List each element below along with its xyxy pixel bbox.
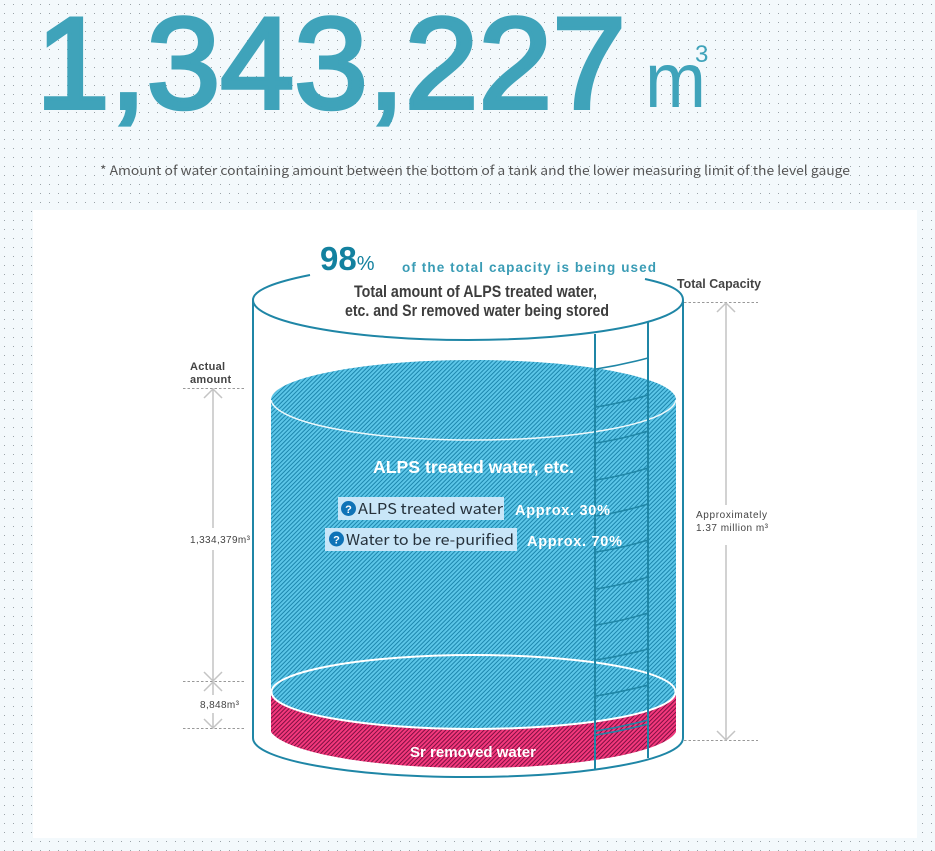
icon: question mark: ? xyxy=(345,504,352,516)
icon: question mark: ? xyxy=(333,534,340,546)
footnote: * Amount of water containing amount between the bottom of a tank and the lower measuring limit of the level gauge xyxy=(100,160,850,179)
label: ALPS treated water, etc.: ALPS treated water, etc. xyxy=(373,457,574,477)
water: Sr removed water: Sr removed water xyxy=(410,744,536,761)
icon: question mark xyxy=(329,532,344,546)
row: ALPS treated water 30%: ALPS treated water xyxy=(358,498,503,519)
label: total amount stored xyxy=(345,282,609,320)
label: total amount stored: Total amount of ALPS treated water, xyxy=(354,282,597,301)
row: water to be re-purified 70%: Water to be re-purified xyxy=(346,529,514,550)
callout: 98% usage: of the total capacity is being used xyxy=(402,260,656,275)
row: water to be re-purified 70%: Approx. 70% xyxy=(527,534,622,550)
row: ALPS treated water 30% xyxy=(338,497,610,520)
callout: 98% usage: 98% xyxy=(320,240,375,277)
dimension: actual amount xyxy=(183,361,251,728)
water: Sr removed water xyxy=(271,690,676,768)
dimension: actual amount: 8,848m³ xyxy=(200,700,240,711)
dimension: total capacity: Total Capacity xyxy=(677,277,761,291)
icon: question mark xyxy=(341,501,356,516)
row: ALPS treated water 30%: Approx. 30% xyxy=(515,503,610,519)
dimension: actual amount: 1,334,379m³ xyxy=(190,535,251,546)
water: ALPS treated water, etc. xyxy=(271,360,676,730)
row: water to be re-purified 70% xyxy=(325,528,622,551)
dimension: total capacity: 1.37 million m³ xyxy=(696,523,769,534)
tank diagram xyxy=(253,275,683,777)
callout: 98% usage xyxy=(320,240,656,277)
title: total volume figure: m xyxy=(645,36,706,124)
label: total amount stored: etc. and Sr removed water being stored xyxy=(345,301,609,320)
dimension: total capacity: Approximately xyxy=(696,510,767,521)
panel: white background xyxy=(33,210,917,838)
dimension: total capacity xyxy=(677,277,769,740)
dimension: actual amount: Actual xyxy=(190,361,225,373)
tank outline xyxy=(253,275,683,777)
title: total volume figure: 3 xyxy=(695,41,708,68)
dimension: actual amount: amount xyxy=(190,374,232,386)
ladder xyxy=(595,322,648,770)
